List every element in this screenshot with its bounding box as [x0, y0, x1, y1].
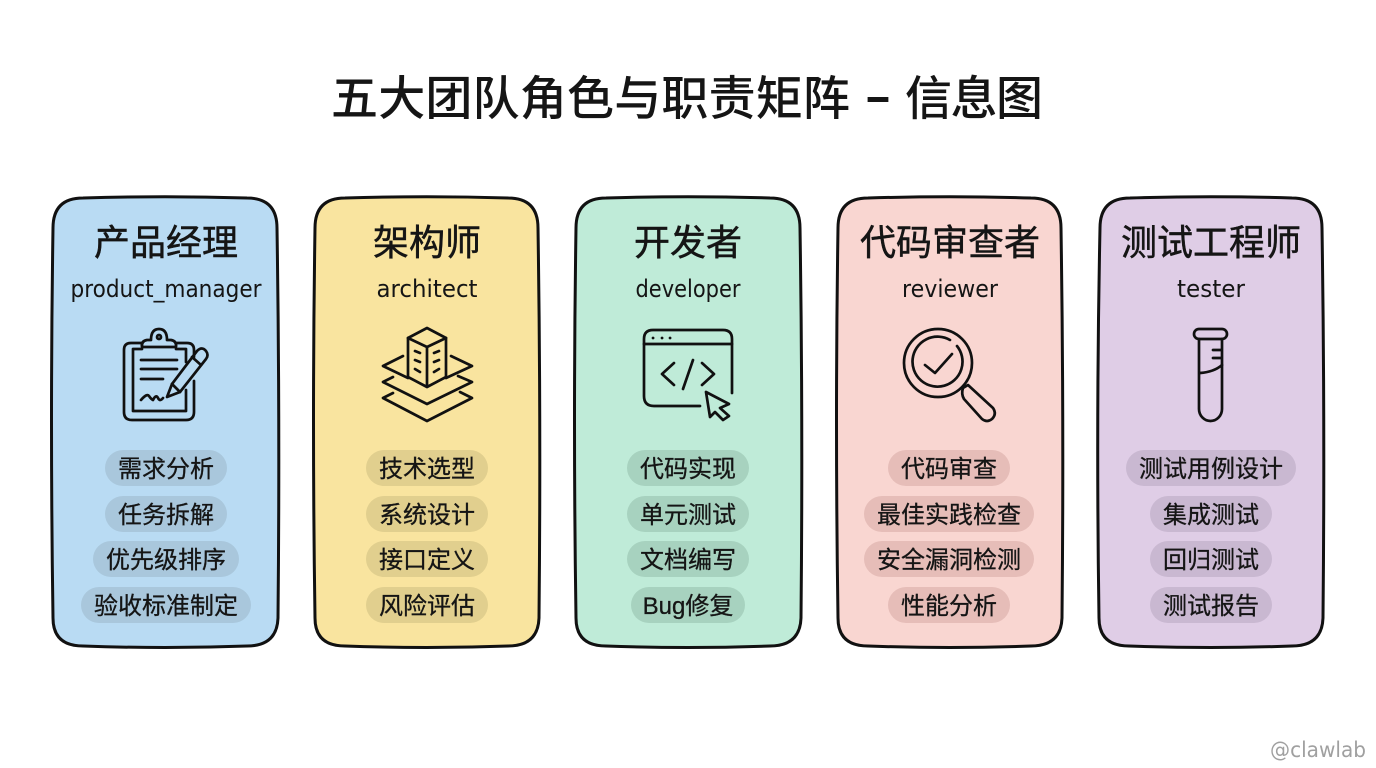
tag: 文档编写 [627, 541, 749, 577]
tag: 测试用例设计 [1126, 450, 1296, 486]
tag: 性能分析: 性能分析 [901, 593, 997, 620]
tag: Bug修复: Bug修复 [643, 593, 733, 620]
tag: 验收标准制定 [81, 587, 251, 623]
title: 五大团队角色与职责矩阵 [331, 72, 850, 125]
tag: 回归测试: 回归测试 [1163, 547, 1259, 574]
heading: 测试工程师 [1121, 222, 1301, 263]
icon: test tube [1194, 329, 1227, 421]
panel: developer [574, 197, 802, 648]
tag: 需求分析 [105, 450, 227, 486]
watermark: @clawlab [1270, 738, 1366, 762]
subheading: developer [636, 275, 741, 303]
tag: 单元测试: 单元测试 [640, 502, 736, 529]
tag: 测试报告 [1150, 587, 1272, 623]
tag: 性能分析 [888, 587, 1010, 623]
tag: 安全漏洞检测: 安全漏洞检测 [877, 547, 1021, 574]
subheading: reviewer [902, 275, 998, 303]
tag: 风险评估 [366, 587, 488, 623]
tag: 测试报告: 测试报告 [1163, 593, 1259, 620]
tag: 代码审查: 代码审查 [901, 456, 997, 483]
tag: 优先级排序: 优先级排序 [106, 547, 226, 574]
tag: 风险评估: 风险评估 [379, 593, 475, 620]
heading: 代码审查者 [860, 222, 1040, 263]
icon: magnifier with check [904, 329, 995, 421]
subheading: product_manager [70, 275, 262, 303]
tag: 最佳实践检查 [864, 496, 1034, 532]
panel: reviewer [836, 197, 1063, 648]
title: – [867, 75, 889, 119]
tag: 技术选型 [366, 450, 488, 486]
tag: 测试用例设计: 测试用例设计 [1139, 456, 1283, 483]
tag: 安全漏洞检测 [864, 541, 1034, 577]
tag: 系统设计 [366, 496, 488, 532]
heading: 开发者 [634, 222, 742, 263]
panel: product manager [52, 197, 279, 648]
icon: code window and cursor [644, 330, 732, 420]
tag: 单元测试 [627, 496, 749, 532]
tag: 优先级排序 [93, 541, 239, 577]
tag: 系统设计: 系统设计 [379, 502, 475, 529]
tag: 技术选型: 技术选型 [379, 456, 475, 483]
tag: 回归测试 [1150, 541, 1272, 577]
tag: 集成测试 [1150, 496, 1272, 532]
tag: 验收标准制定: 验收标准制定 [94, 593, 238, 620]
tag: Bug修复 [631, 587, 745, 623]
icon: clipboard and pencil [124, 329, 208, 420]
title: 信息图 [905, 72, 1043, 125]
tag: 代码实现 [627, 450, 749, 486]
card background [1098, 197, 1324, 648]
panel: architect [314, 197, 540, 648]
tag: 需求分析: 需求分析 [118, 456, 214, 483]
tag: 任务拆解 [105, 496, 227, 532]
card background [52, 197, 279, 648]
tag: 接口定义 [366, 541, 488, 577]
heading: 架构师 [373, 222, 481, 263]
tag: 任务拆解: 任务拆解 [118, 502, 214, 529]
tag: 代码审查 [888, 450, 1010, 486]
tag: 最佳实践检查: 最佳实践检查 [877, 502, 1021, 529]
subheading: architect [376, 275, 478, 303]
tag: 代码实现: 代码实现 [640, 456, 736, 483]
tag: 文档编写: 文档编写 [640, 547, 736, 574]
icon: building on layers [383, 328, 472, 421]
subheading: tester [1177, 275, 1245, 303]
card background [836, 197, 1063, 648]
heading: 产品经理 [94, 222, 238, 263]
panel: tester [1098, 197, 1324, 648]
card background [574, 197, 802, 648]
tag: 集成测试: 集成测试 [1163, 502, 1259, 529]
tag: 接口定义: 接口定义 [379, 547, 475, 574]
card background [314, 197, 540, 648]
